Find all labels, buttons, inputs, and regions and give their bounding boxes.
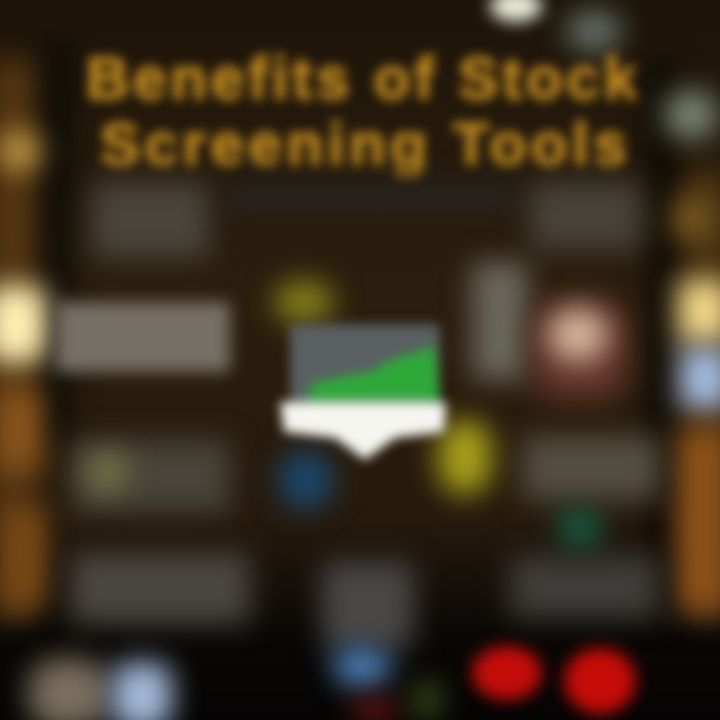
panel: lower centre [322, 562, 414, 648]
icon: right red circle [564, 648, 636, 714]
icon: olive badge [274, 280, 334, 324]
icon: red and cream badge [532, 300, 628, 400]
top teal light [566, 10, 622, 52]
dark right pillar [650, 60, 674, 620]
icon: left red circle [472, 646, 542, 700]
right cream panel [678, 280, 720, 342]
bottom centre red accent [350, 696, 400, 720]
dark left pillar [46, 40, 70, 440]
icon: cream highlight [548, 308, 608, 362]
title [80, 45, 643, 184]
bottom centre green accent [412, 680, 442, 720]
icon: green accent [558, 512, 602, 544]
bottom left tan icon [28, 658, 110, 720]
panel: left feature [56, 302, 230, 372]
right blue panel [680, 348, 720, 408]
chart background [290, 324, 440, 402]
left side strip [0, 60, 38, 620]
panel: lower left [70, 552, 250, 624]
chart area: green growth [308, 346, 440, 400]
right side strip [682, 170, 720, 620]
panel: lower right [510, 556, 660, 618]
icon: grey column [472, 262, 528, 380]
left cream panel [0, 286, 46, 362]
panel: middle right [522, 436, 660, 500]
panel: upper right [530, 182, 642, 250]
left orange area [0, 390, 40, 470]
right amber light [670, 195, 714, 241]
icon: yellow badge [438, 420, 492, 494]
right orange area [678, 430, 720, 610]
title: Screening Tools [100, 111, 631, 178]
icon: blue badge [278, 450, 334, 510]
panel: middle left [72, 440, 230, 512]
top white light [490, 0, 542, 22]
chart base: white banner [280, 402, 446, 460]
bottom left blue icon [112, 662, 172, 720]
left yellow light [0, 130, 40, 172]
bottom centre blue icon [332, 646, 392, 688]
chart: central growth chart [272, 318, 454, 467]
title: Benefits of Stock [86, 45, 641, 112]
left lower orange area [4, 510, 44, 605]
panel: upper left [92, 182, 210, 258]
panel: upper centre band [225, 183, 520, 213]
icon: olive accent [85, 452, 129, 492]
right grey-green light [664, 90, 718, 140]
